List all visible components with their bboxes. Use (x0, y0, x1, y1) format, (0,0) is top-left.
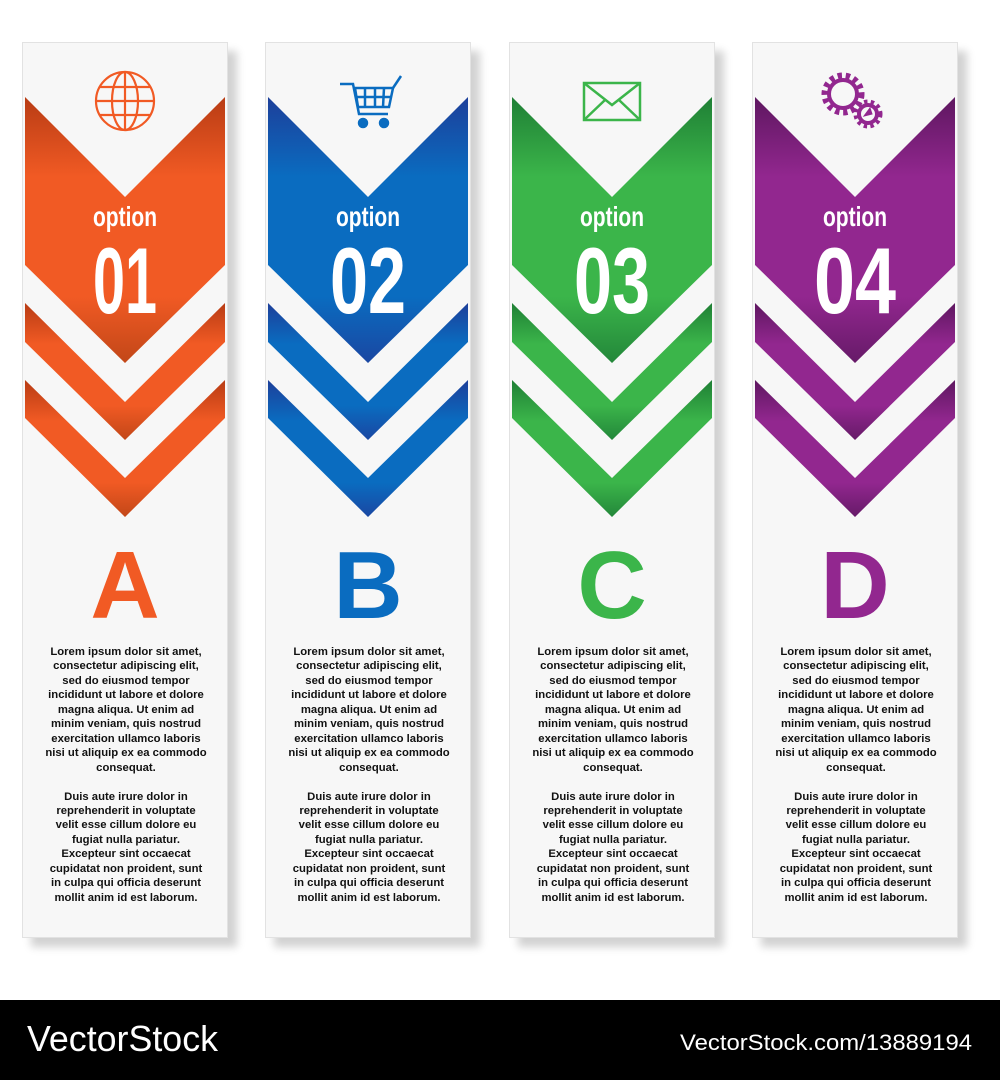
text block: incididunt ut labore et dolore (778, 689, 934, 701)
footer bar (0, 1000, 1000, 1080)
text block: Duis aute irure dolor in (794, 791, 918, 803)
text block: reprehenderit in voluptate (56, 805, 196, 817)
text block: Duis aute irure dolor in (551, 791, 675, 803)
icon: globe (96, 72, 154, 130)
label: option 04: 04 (814, 228, 896, 333)
text block: consectetur adipiscing elit, (783, 660, 929, 672)
text block (775, 646, 937, 904)
text block (532, 646, 694, 904)
text block: incididunt ut labore et dolore (48, 689, 204, 701)
text block: reprehenderit in voluptate (786, 805, 926, 817)
panel: option 04 (752, 42, 958, 938)
text block: Lorem ipsum dolor sit amet, (780, 646, 932, 658)
text block: consequat. (826, 762, 886, 774)
text block: fugiat nulla pariatur. (802, 834, 910, 846)
text block: magna aliqua. Ut enim ad (788, 704, 924, 716)
label: option 01 (93, 201, 157, 333)
text block: magna aliqua. Ut enim ad (58, 704, 194, 716)
chevrons (268, 97, 468, 517)
text block: minim veniam, quis nostrud (51, 718, 201, 730)
text block: in culpa qui officia deserunt (538, 877, 688, 889)
text block: velit esse cillum dolore eu (543, 819, 683, 831)
panel: option 02 (265, 42, 471, 938)
text block (45, 646, 207, 904)
text block: sed do eiusmod tempor (549, 675, 677, 687)
text block: minim veniam, quis nostrud (781, 718, 931, 730)
text block: cupidatat non proident, sunt (537, 863, 689, 875)
text block: Duis aute irure dolor in (64, 791, 188, 803)
text block: Excepteur sint occaecat (548, 848, 678, 860)
letter D: D (820, 532, 890, 639)
text block: velit esse cillum dolore eu (56, 819, 196, 831)
text block: exercitation ullamco laboris (538, 733, 688, 745)
text block: sed do eiusmod tempor (62, 675, 190, 687)
label: option 03: option (580, 201, 644, 232)
text block: consectetur adipiscing elit, (53, 660, 199, 672)
text block: fugiat nulla pariatur. (315, 834, 423, 846)
panel: option 03 (509, 42, 715, 938)
text block: reprehenderit in voluptate (299, 805, 439, 817)
text block: mollit anim id est laborum. (784, 892, 928, 904)
text block: incididunt ut labore et dolore (291, 689, 447, 701)
text block: in culpa qui officia deserunt (294, 877, 444, 889)
text block: consequat. (339, 762, 399, 774)
text block: Lorem ipsum dolor sit amet, (293, 646, 445, 658)
icon: envelope (584, 83, 640, 120)
icon: gears (826, 77, 879, 125)
text block: mollit anim id est laborum. (297, 892, 441, 904)
text block: sed do eiusmod tempor (792, 675, 920, 687)
text block: cupidatat non proident, sunt (50, 863, 202, 875)
icon: cart (340, 76, 401, 127)
text block: fugiat nulla pariatur. (559, 834, 667, 846)
watermark left: VectorStock (27, 1018, 219, 1059)
text block: cupidatat non proident, sunt (780, 863, 932, 875)
panel: option 01 (22, 42, 228, 938)
text block: in culpa qui officia deserunt (781, 877, 931, 889)
label: option 01: 01 (93, 228, 157, 333)
chevrons (25, 97, 225, 517)
text block: velit esse cillum dolore eu (786, 819, 926, 831)
chevrons (755, 97, 955, 517)
text block: fugiat nulla pariatur. (72, 834, 180, 846)
label: option 04 (814, 201, 896, 333)
text block: Excepteur sint occaecat (61, 848, 191, 860)
text block: nisi ut aliquip ex ea commodo (775, 747, 937, 759)
text block: nisi ut aliquip ex ea commodo (532, 747, 694, 759)
label: option 02 (330, 201, 406, 333)
text block: minim veniam, quis nostrud (538, 718, 688, 730)
label: option 03 (574, 201, 650, 333)
text block: incididunt ut labore et dolore (535, 689, 691, 701)
text block: in culpa qui officia deserunt (51, 877, 201, 889)
text block: Duis aute irure dolor in (307, 791, 431, 803)
text block: mollit anim id est laborum. (541, 892, 685, 904)
label: option 02: 02 (330, 228, 406, 333)
label: option 03: 03 (574, 228, 650, 333)
letter B: B (333, 532, 403, 639)
text block: Excepteur sint occaecat (791, 848, 921, 860)
text block: velit esse cillum dolore eu (299, 819, 439, 831)
text block: exercitation ullamco laboris (781, 733, 931, 745)
label: option 02: option (336, 201, 400, 232)
letter C: C (577, 532, 647, 639)
label: option 01: option (93, 201, 157, 232)
text block: reprehenderit in voluptate (543, 805, 683, 817)
text block: sed do eiusmod tempor (305, 675, 433, 687)
text block: consequat. (583, 762, 643, 774)
text block: Lorem ipsum dolor sit amet, (537, 646, 689, 658)
text block: consectetur adipiscing elit, (296, 660, 442, 672)
text block (288, 646, 450, 904)
text block: magna aliqua. Ut enim ad (545, 704, 681, 716)
text block: nisi ut aliquip ex ea commodo (45, 747, 207, 759)
text block: cupidatat non proident, sunt (293, 863, 445, 875)
label: option 04: option (823, 201, 887, 232)
text block: exercitation ullamco laboris (51, 733, 201, 745)
text block: Lorem ipsum dolor sit amet, (50, 646, 202, 658)
text block: exercitation ullamco laboris (294, 733, 444, 745)
chevrons (512, 97, 712, 517)
text block: mollit anim id est laborum. (54, 892, 198, 904)
text block: magna aliqua. Ut enim ad (301, 704, 437, 716)
watermark right: VectorStock.com/13889194 (680, 1030, 972, 1055)
text block: minim veniam, quis nostrud (294, 718, 444, 730)
text block: consectetur adipiscing elit, (540, 660, 686, 672)
text block: Excepteur sint occaecat (304, 848, 434, 860)
text block: nisi ut aliquip ex ea commodo (288, 747, 450, 759)
letter A: A (90, 532, 160, 639)
text block: consequat. (96, 762, 156, 774)
